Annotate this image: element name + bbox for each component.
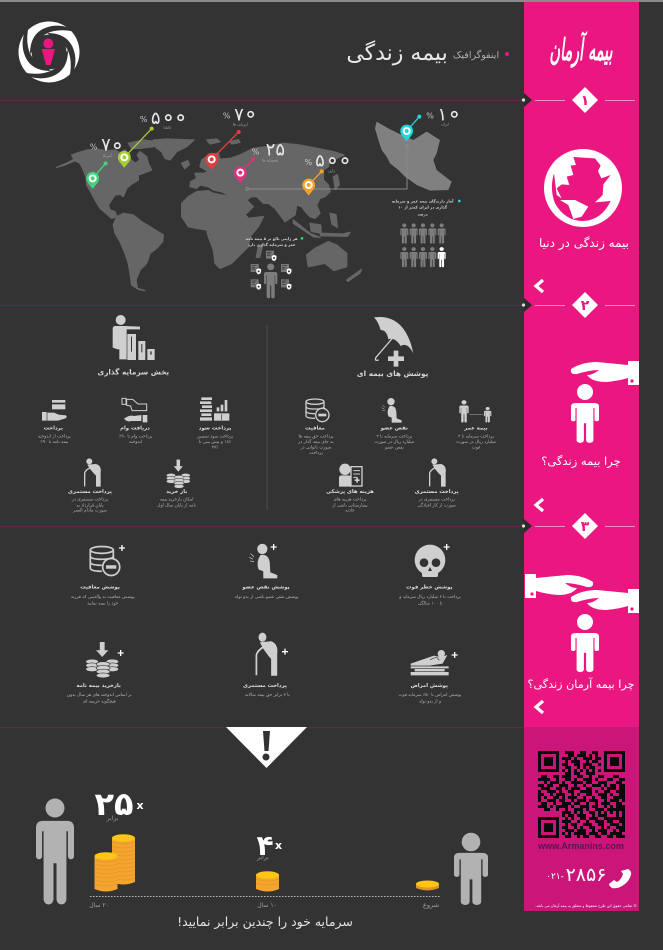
pin: neighbours 25: ۲۵ — [266, 140, 285, 161]
item: life insurance — [456, 400, 496, 450]
item: life insurance: بیمه عمر — [463, 425, 488, 431]
icon: two hands over person — [525, 574, 639, 672]
sidebar text: life insurance in the world: بیمه زندگی در دنیا — [539, 236, 629, 251]
item: loan: پرداخت وام تا ۹۰٪ — [119, 435, 153, 440]
item: exemption: به جای بیمه گذار در — [297, 439, 334, 445]
pink sidebar — [524, 2, 639, 911]
title: بیمه زندگی — [346, 40, 448, 66]
pin: Canada 500: ۰ — [176, 106, 186, 127]
item: disability — [374, 398, 414, 450]
pin: America 70: ۷ — [101, 134, 111, 155]
sidebar: badge 1: ۱ — [581, 93, 589, 109]
pin: Canada 500: ۵ — [151, 108, 161, 129]
icon: investor with bars — [113, 315, 155, 360]
heading: insurance coverages: پوشش های بیمه ای — [357, 369, 429, 378]
chevron 2 — [536, 499, 543, 511]
logo — [18, 22, 80, 82]
item: death cover: پرداخت تا ۶ میلیارد ریال سرمایه و — [398, 595, 462, 600]
text: Iran statistic: آمار دارندگان بیمه عمر و سرمایه — [392, 198, 454, 203]
coin stacks — [94, 834, 439, 892]
item: disability cover: پوشش نقص عضو ناشی از بدو تولد — [235, 595, 299, 600]
item: disability: میلیارد ریال در صورت — [374, 440, 414, 445]
item: profit payment: پرداخت سود — [199, 425, 231, 431]
item: withdrawal: برداخت — [44, 425, 63, 431]
item: pension: پرداخت مستمری — [415, 489, 459, 495]
pin: Europe 70: ۷ — [234, 104, 244, 125]
timeline — [90, 896, 440, 898]
person with policies — [251, 251, 292, 298]
item: surrender cover — [67, 642, 132, 704]
chevron 3 — [536, 701, 543, 713]
item: annuity: پایان قرارداد به — [76, 503, 104, 508]
item: surrender cover: هیچگونه جریمه ای — [83, 698, 117, 704]
item: medical costs: بیمارستانی ناشی از — [331, 503, 368, 508]
item: disability cover: پوشش نقص عضو — [241, 585, 290, 591]
pin: America 70: ۰ — [112, 134, 122, 155]
item: annuity: صورت مادام العمر — [72, 509, 107, 514]
multiplier: 4x: ۴ — [256, 829, 274, 862]
text: Iran statistic: درصد — [418, 211, 428, 216]
text: Iran statistic — [392, 198, 461, 216]
item: exemption: پرداخت — [309, 451, 324, 456]
pin: America 70: آمریکا — [103, 153, 113, 158]
pin: Canada 500 — [118, 106, 186, 168]
pin: Canada 500: ۰ — [163, 106, 173, 127]
item: pension: پرداخت مستمری در — [418, 498, 456, 503]
item: exemption cover: خود را بیمه نمایند — [87, 601, 119, 606]
copyright: © تمامی حقوق این طرح محفوظ و متعلق به بیمه آرمان می باشد. — [535, 903, 637, 908]
map of Iran — [375, 122, 452, 191]
item: death cover — [398, 544, 462, 606]
item: exemption: صورت ناتوانی در — [300, 445, 332, 450]
website: www.Armanins.com — [537, 841, 624, 851]
title: اینفوگرافیک — [453, 49, 499, 61]
phone number — [546, 864, 631, 888]
item: illness cover — [399, 650, 462, 704]
multiplier: 4x: برابر — [256, 854, 269, 861]
warning triangle — [226, 727, 307, 768]
item: illness cover: و از بدو تولد — [419, 699, 441, 704]
pin: Canada 500: % — [140, 115, 148, 124]
item: death cover: تا ۱۰۰ سالگی — [418, 600, 443, 606]
item: profit payment: پرداخت سود تضمین — [197, 435, 234, 440]
item: illness cover: پوشش امراض — [411, 683, 448, 689]
sidebar: brand: بیمه آرمان — [549, 29, 613, 69]
timeline labels — [89, 901, 439, 909]
pin: Iran 10: ۰ — [449, 103, 459, 124]
pin: neighbours 25: % — [252, 147, 260, 156]
pin: Japan 500 — [302, 149, 350, 195]
pin: America 70 — [86, 134, 122, 189]
phone number: ۰۲۱- — [546, 872, 564, 882]
world map — [57, 139, 362, 291]
closing line: سرمایه خود را چندین برابر نمایید! — [177, 914, 353, 930]
sidebar text: why Arman: چرا بیمه آرمان زندگی؟ — [528, 677, 635, 692]
pin: Japan 500: ژاپن — [328, 169, 335, 173]
heading: investment section: بخش سرمایه گذاری — [97, 368, 169, 377]
item: disability cover — [235, 544, 299, 600]
item: annuity cover: تا ۳ برابر حق بیمه سالانه — [245, 693, 290, 698]
connector line — [246, 144, 408, 190]
item: exemption cover: پوشش معافیت — [80, 585, 120, 591]
item: disability: پرداخت سرمایه تا ۳ — [376, 435, 413, 440]
multiplier: 4x — [256, 829, 282, 862]
pin: Iran 10: % — [426, 112, 434, 121]
item: disability: نقص عضو — [384, 445, 404, 450]
item: medical costs — [326, 464, 374, 514]
text: Japan statistic — [246, 236, 303, 247]
item: profit payment: ۲۷٪ — [212, 445, 219, 450]
pin: Japan 500: % — [305, 158, 313, 167]
item: surrender cover: بازخرید بیمه نامه — [76, 683, 121, 689]
item: surrender: نامه از پایان سال اول — [157, 503, 196, 508]
icon: hand over person — [571, 361, 639, 443]
item: surrender cover: بر اساس اندوخته های هر سال بدون — [67, 693, 132, 698]
item: annuity: پرداخت مستمری در — [71, 498, 109, 503]
text: Japan statistic: هر ژاپنی بالغ بر ۵ بیمه نامه — [246, 236, 298, 241]
item: medical costs: پرداخت هزینه های — [334, 498, 367, 503]
multiplier: 25x: x — [136, 799, 144, 812]
pin: Europe 70: % — [223, 112, 231, 121]
item: surrender: امکان بازخرید بیمه — [160, 497, 193, 503]
pin: Iran 10: ۱ — [437, 104, 447, 125]
child figure — [454, 833, 488, 905]
pin: neighbours 25: همسایه ها — [262, 158, 278, 162]
adult figure — [36, 798, 74, 904]
item: annuity — [68, 458, 112, 514]
item: loan — [119, 398, 153, 445]
item: loan: اندوخته — [129, 440, 142, 445]
item: annuity: پرداخت مستمری — [68, 489, 112, 495]
item: withdrawal: بیمه نامه تا ۹۰٪ — [40, 440, 68, 445]
pin: Europe 70 — [205, 103, 256, 170]
vertical divider — [266, 325, 268, 510]
item: loan: دریافت وام — [120, 425, 150, 431]
item: pension: صورت از کار افتادگی — [417, 502, 456, 508]
text: Iran statistic: گذاری در ایران کمتر از ۱۰ — [398, 205, 448, 210]
text: Japan statistic: عمر و سرمایه گذاری دارد — [248, 242, 296, 247]
sidebar: badge 3: ۳ — [581, 519, 590, 535]
item: annuity cover: پرداخت مستمری — [243, 683, 287, 689]
pin: Iran 10: ایران — [441, 123, 449, 127]
item: life insurance: پرداخت سرمایه تا ۲ — [458, 435, 495, 440]
title — [346, 40, 509, 66]
pin: Canada 500: کانادا — [164, 126, 171, 130]
item: death cover: پوشش خطر فوت — [406, 585, 453, 591]
item: pension — [415, 458, 459, 508]
item: exemption — [297, 399, 334, 456]
item: exemption cover — [71, 545, 135, 606]
timeline labels: ۲۰ سال — [89, 902, 109, 909]
item: medical costs: هزینه های پزشکی — [326, 488, 374, 495]
section divider lines — [0, 100, 524, 728]
people grid: ten percent — [400, 223, 446, 267]
item: surrender — [157, 459, 196, 508]
sidebar: badge 2: ۲ — [581, 298, 590, 314]
item: exemption: معافیت — [305, 425, 325, 431]
pin: Europe 70: ۰ — [246, 103, 256, 124]
sidebar text: why life insurance: چرا بیمه زندگی؟ — [541, 454, 621, 469]
multiplier: 4x: x — [275, 839, 282, 852]
phone number: ۲۸۵۶ — [566, 864, 606, 886]
item: exemption cover: پوشش معافیت به والدینی که فرزند — [71, 594, 135, 600]
panel: growth of capital — [36, 727, 488, 930]
item: withdrawal: پرداخت از اندوخته — [38, 435, 72, 440]
sidebar: badge 1 — [535, 87, 635, 113]
item: medical costs: حادثه — [345, 509, 355, 514]
sidebar: badge 2 — [535, 292, 635, 318]
multiplier: 25x: ۲۵ — [94, 785, 134, 823]
pin: Japan 500: ۵ — [315, 151, 325, 172]
timeline labels: شروع — [423, 901, 439, 909]
item: exemption: پرداخت حق بیمه ها — [298, 435, 334, 440]
item: profit payment: ۱۸٪ و پیش بینی تا — [199, 440, 232, 445]
icon: globe — [544, 149, 622, 227]
multiplier: 25x: برابر — [106, 815, 119, 822]
item: life insurance: میلیارد ریال در صورت — [456, 440, 496, 445]
item: disability: نقص عضو — [380, 425, 408, 431]
chevron 1 — [536, 280, 543, 292]
item: profit payment — [197, 397, 234, 450]
timeline labels: ۱۰ سال — [257, 902, 277, 909]
item: annuity cover — [243, 633, 290, 698]
QR code — [538, 752, 625, 836]
sidebar: badge 3 — [535, 513, 635, 539]
icon: umbrella with plus — [374, 317, 413, 367]
pin: Japan 500: ۰ — [340, 149, 350, 170]
item: life insurance: فوت — [472, 445, 480, 450]
pin: Europe 70: اروپایی ها — [233, 123, 248, 127]
item: withdrawal — [38, 400, 72, 445]
pin: Japan 500: ۰ — [327, 149, 337, 170]
item: illness cover: پوشش امراض تا ۵۰٪ سرمایه فوت — [399, 693, 462, 698]
panel: world map section — [57, 103, 461, 298]
panel: insurance and investment — [38, 315, 496, 514]
panel: coverages — [67, 544, 462, 704]
item: surrender: باز خرید — [166, 489, 187, 495]
pin: Iran 10 — [400, 103, 459, 141]
pin: neighbours 25 — [234, 140, 285, 183]
pin: America 70: % — [90, 143, 98, 152]
